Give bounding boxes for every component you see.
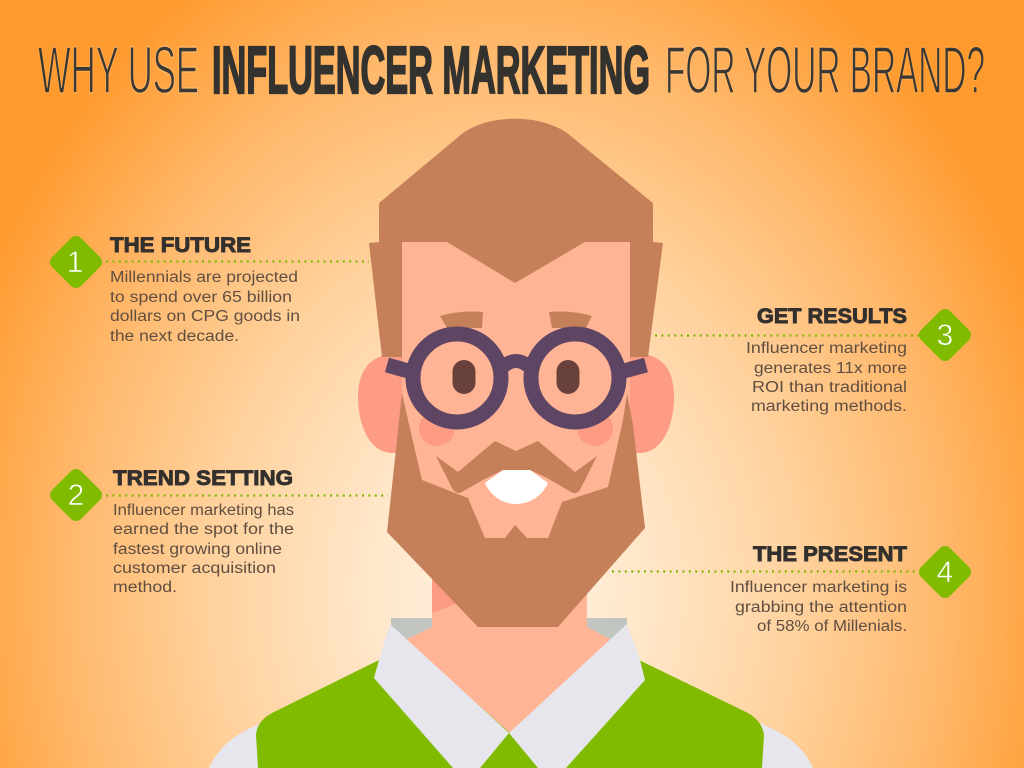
callout 2: trend setting: earned the spot for the [113,521,294,538]
callout 3: get results: 3 [937,319,953,352]
callout 3: get results [655,305,964,415]
eyebrows [440,312,592,328]
callout 1: the future: dollars on CPG goods in [110,308,300,325]
callout 1: the future [57,234,369,345]
collar right [509,624,645,768]
callout 4: the present: grabbing the attention [735,599,907,616]
callout 3: get results: Influencer marketing [746,340,907,357]
beard [387,393,645,627]
title: WHY USE [38,33,199,108]
face [402,240,630,520]
callout 1: the future: Millennials are projected [110,269,298,286]
neck [405,480,612,733]
callout 3: get results: GET RESULTS [757,305,907,328]
callout 2: trend setting: Influencer marketing has [113,502,294,519]
callout 2: trend setting [57,467,388,596]
callout 2: trend setting: 2 [68,479,84,512]
callout 4: the present: Influencer marketing is [730,579,907,596]
illustration: bearded man with glasses [209,119,813,768]
callout 4: the present: THE PRESENT [753,543,907,566]
callout 4: the present: of 58% of Millenials. [757,618,907,635]
callout 3: get results: marketing methods. [751,398,907,415]
callout 1: the future: the next decade. [110,328,239,345]
collar back [391,618,627,650]
hair sides [369,240,663,357]
callout 3: get results: ROI than traditional [752,379,907,396]
callout 2: trend setting: fastest growing online [113,541,282,558]
mouth [485,470,548,504]
callout 2: trend setting: TREND SETTING [113,467,293,490]
glasses [387,334,646,422]
green vest [256,660,764,768]
shirt sleeves [209,723,813,768]
callout 4: the present [612,543,964,635]
neck shadow [432,530,456,613]
ears [358,355,674,453]
cheeks [419,410,613,446]
callout 1: the future: 1 [67,246,83,279]
collar left [374,624,509,768]
hair top [379,119,653,283]
mustache [436,441,597,493]
callout 1: the future: to spend over 65 billion [110,289,292,306]
callout 1: the future: THE FUTURE [110,234,251,257]
callout 4: the present: 4 [937,556,953,589]
callout 2: trend setting: customer acquisition [113,560,276,577]
callout 3: get results: generates 11x more [754,360,907,377]
eyes [452,360,580,394]
callout 2: trend setting: method. [113,579,177,596]
